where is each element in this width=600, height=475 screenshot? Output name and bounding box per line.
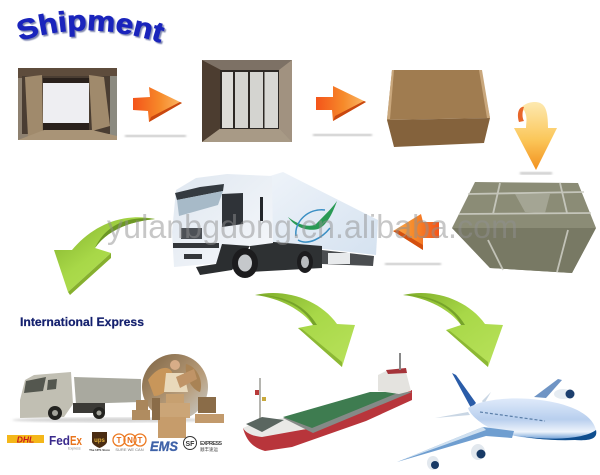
side window (222, 193, 243, 227)
tail fin (452, 373, 476, 408)
title: Shipment: Shipment (17, 10, 165, 43)
chassis (250, 240, 322, 272)
bridge (378, 370, 411, 394)
side of hold (283, 392, 412, 433)
logo: UPS: ups (94, 438, 105, 444)
logo: TNT: T (117, 436, 122, 445)
watermark: yulanbgdong.cn.alibaba.com: yulanbgdong.cn.alibaba.com (107, 208, 518, 245)
arrow: orange right 1 (125, 87, 186, 137)
logo: FedEx (49, 433, 83, 450)
far wing and engine (534, 379, 562, 398)
engines (471, 444, 485, 460)
logo: UPS (89, 432, 110, 452)
cab (20, 372, 73, 418)
arrow: green curved to international express (54, 217, 155, 295)
cab (172, 174, 273, 267)
illustration: cargo ship (243, 353, 412, 451)
cargo deck (283, 392, 400, 428)
arrow: yellow down (514, 102, 557, 174)
logo: TNT: T (138, 436, 143, 445)
bow mast (259, 378, 261, 427)
logo: UPS: The UPS Store (89, 448, 110, 452)
hull white at bow (243, 418, 312, 437)
heading: International Express: International Express (20, 315, 144, 329)
photo: carton with four packed panels (202, 60, 292, 142)
truck: white lorry with trailer (172, 172, 378, 278)
arrow: green curved to ship (255, 293, 355, 367)
logo: SF Express: SF (186, 441, 195, 448)
arrow: green curved to plane (403, 293, 503, 367)
courier (170, 360, 180, 370)
logo: DHL (7, 434, 44, 444)
trailer body (270, 172, 378, 255)
parcels (166, 394, 184, 403)
logo: FedEx: Ex (70, 433, 83, 448)
windshield (177, 191, 223, 216)
photo: closed brown carton (387, 70, 490, 147)
trailer logo (288, 201, 337, 242)
trailer (74, 377, 141, 404)
photo: open carton with white panel (18, 68, 117, 140)
logo: TNT: N (127, 436, 133, 445)
illustration: express truck, globe, courier and parcels (12, 354, 224, 438)
fuselage (468, 398, 596, 440)
logo: EMS: EMS (150, 438, 179, 454)
logo: SF Express: 顺丰速运 (200, 446, 218, 453)
logo: FedEx: Express (68, 446, 81, 450)
logo: SF Express: EXPRESS (200, 441, 222, 447)
visor (175, 184, 224, 200)
logo: SF Express (184, 436, 222, 453)
arrow: orange right 2 (313, 86, 372, 136)
arrow: orange left (385, 214, 441, 265)
title: Shipment: Shipment (18, 12, 167, 45)
foredeck gear (246, 417, 284, 432)
courier logos row (7, 432, 222, 454)
globe (142, 354, 208, 420)
logo: FedEx: Fed (49, 433, 70, 448)
logo: DHL: DHL (17, 434, 34, 444)
logo: TNT: SURE WE CAN (115, 447, 144, 452)
window line (480, 412, 545, 421)
grille and bumper (181, 228, 202, 239)
logo: TNT (113, 434, 146, 452)
wheels (232, 248, 258, 278)
illustration: airplane (397, 373, 596, 470)
photo: shrink-wrapped carton (452, 182, 596, 273)
trailer skirt (322, 250, 374, 266)
near wing (397, 427, 514, 462)
hull red (243, 390, 412, 451)
